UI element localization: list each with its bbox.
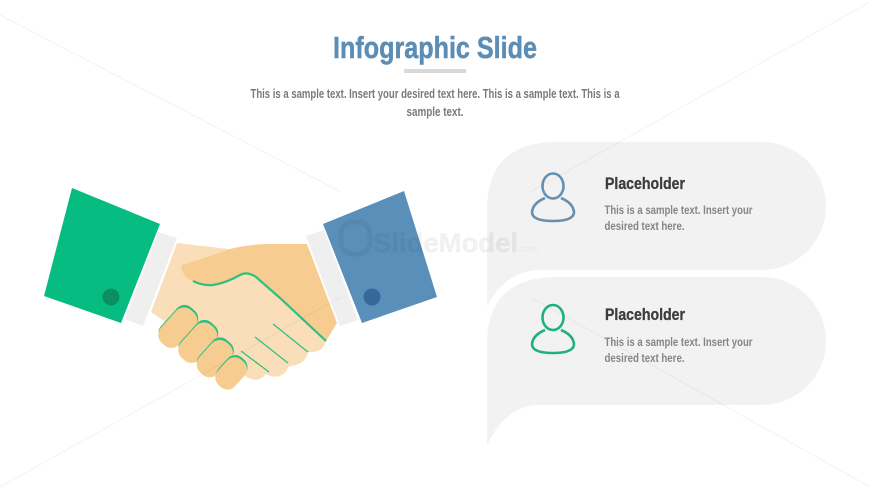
text block: placeholder 2 xyxy=(604,306,753,365)
dark hand xyxy=(181,244,337,341)
text block: placeholder 1: desired text here. xyxy=(604,219,684,233)
title: Infographic Slide xyxy=(333,30,537,65)
finger lines xyxy=(241,324,308,372)
text block: placeholder 2: Placeholder xyxy=(605,306,685,324)
panel: bottom speech bubble xyxy=(487,277,826,445)
icon: green person xyxy=(532,305,574,353)
text block: placeholder 1 xyxy=(604,175,753,233)
intro text: sample text. xyxy=(406,105,464,119)
blue sleeve xyxy=(323,191,437,323)
green sleeve button xyxy=(102,288,120,306)
hand outline accent xyxy=(193,273,326,341)
green sleeve xyxy=(44,188,160,323)
text block: placeholder 2: desired text here. xyxy=(604,351,684,365)
intro text xyxy=(250,87,620,119)
illustration: handshake xyxy=(44,188,437,394)
right shirt cuff xyxy=(306,230,358,326)
fingers xyxy=(153,301,252,394)
watermark: SlideModel xyxy=(373,228,518,258)
text block: placeholder 2: This is a sample text. Insert your xyxy=(604,335,753,349)
icon: blue person xyxy=(532,174,574,221)
watermark: .com xyxy=(518,244,537,254)
blue sleeve button xyxy=(364,288,380,306)
watermark xyxy=(341,222,537,258)
panel: top speech bubble xyxy=(487,142,826,306)
left shirt cuff xyxy=(125,232,177,326)
text block: placeholder 1: This is a sample text. Insert your xyxy=(604,203,753,217)
light hand xyxy=(151,243,326,380)
text block: placeholder 1: Placeholder xyxy=(605,175,685,193)
intro text: This is a sample text. Insert your desired text here. This is a sample text. This is a xyxy=(250,87,620,101)
title underline xyxy=(404,69,466,73)
